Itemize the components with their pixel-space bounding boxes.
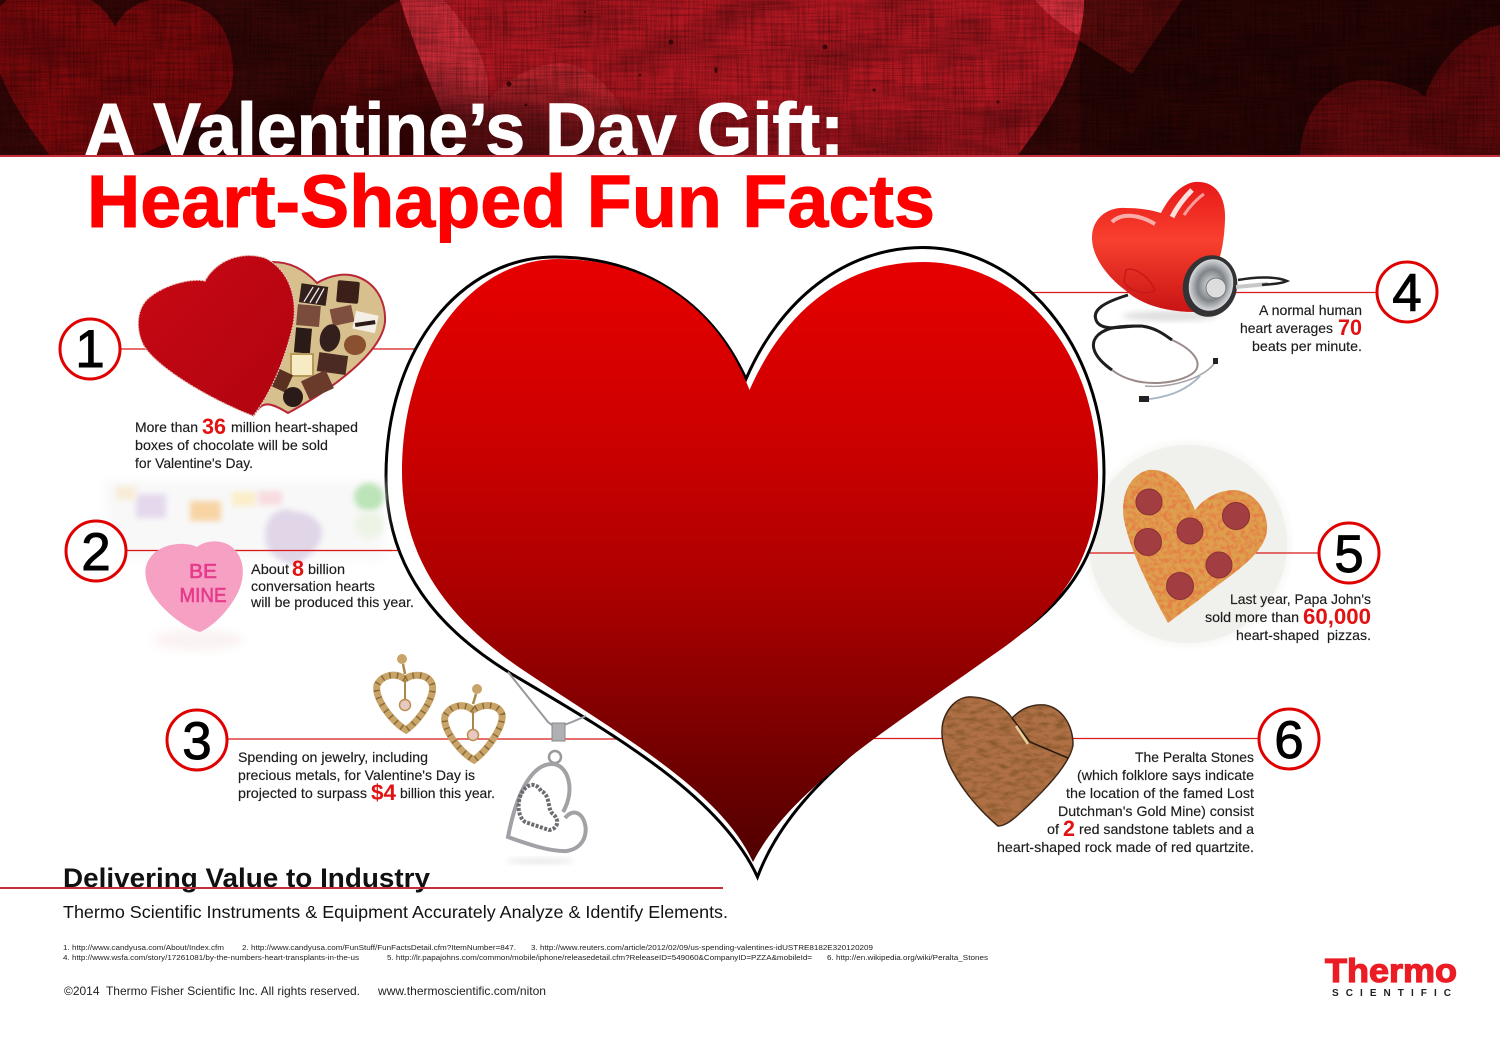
text: fact 1 (135, 414, 358, 471)
image: conversation heart: BE (189, 561, 217, 583)
text: fact 1: 36 (202, 414, 226, 439)
references: 3. http://www.reuters.com/article/2012/02/09/us-spending-valentines-idUSTRE8182E320120209 (531, 945, 873, 952)
connector line 2 over candy (126, 550, 392, 552)
image: conversation heart: MINE (180, 585, 226, 607)
header texture (0, 0, 1500, 155)
text: fact 6 (997, 749, 1254, 855)
text: fact 5: 60,000 (1303, 604, 1371, 629)
marker 2: 2 (81, 523, 111, 582)
marker 2 (66, 521, 126, 582)
text: fact 2: will be produced this year. (250, 594, 414, 610)
references: 2. http://www.candyusa.com/FunStuff/FunFactsDetail.cfm?ItemNumber=847. (242, 945, 516, 952)
image: conversation heart (145, 541, 244, 650)
text: fact 6: Dutchman's Gold Mine) consist (1058, 803, 1254, 819)
text: fact 1: boxes of chocolate will be sold (135, 437, 328, 453)
text: fact 5: Last year, Papa John's (1230, 591, 1371, 607)
text: fact 6: The Peralta Stones (1135, 749, 1254, 765)
text: fact 4 (1240, 302, 1362, 354)
text: fact 6: heart-shaped rock made of red quartzite. (997, 839, 1254, 855)
text: fact 1: More than (135, 419, 198, 435)
text: fact 3: projected to surpass (238, 785, 367, 801)
copyright line: www.thermoscientific.com/niton (377, 984, 546, 998)
text: fact 2: 8 (292, 556, 304, 581)
text: fact 3: Spending on jewelry, including (238, 749, 428, 765)
footer heading: Delivering Value to Industry (63, 863, 430, 893)
copyright line (64, 984, 546, 998)
right corner hearts (1075, 0, 1500, 155)
central heart outline (386, 248, 1104, 877)
text: fact 3: precious metals, for Valentine's Day is (238, 767, 475, 783)
image: heart pizza (1123, 470, 1268, 623)
text: fact 3: billion this year. (400, 785, 495, 801)
text: fact 4: beats per minute. (1252, 338, 1362, 354)
marker 6 (1259, 709, 1319, 770)
image: heart-shaped chocolate box (138, 255, 385, 416)
left fabric hearts (0, 0, 460, 155)
text: fact 2: conversation hearts (251, 578, 375, 594)
central red heart (402, 259, 1098, 862)
references: 6. http://en.wikipedia.org/wiki/Peralta_Stones (827, 955, 989, 962)
text: fact 1: for Valentine's Day. (135, 455, 253, 471)
text: fact 3: $4 (371, 780, 397, 805)
text: fact 2: About (251, 561, 289, 577)
footer tagline: Thermo Scientific Instruments & Equipment Accurately Analyze & Identify Elements. (63, 902, 728, 922)
title line one: A Valentine’s Day Gift: (84, 88, 844, 171)
references: 4. http://www.wsfa.com/story/17261081/by-the-numbers-heart-transplants-in-the-us (63, 955, 360, 962)
header banner (0, 0, 1500, 155)
marker 1: 1 (75, 320, 105, 379)
text: fact 6: (which folklore says indicate (1077, 767, 1254, 783)
big central heart (400, 0, 1084, 155)
logo: Thermo Scientific: Thermo (1325, 952, 1457, 989)
image: silver heart necklace (506, 672, 586, 864)
text: fact 1: million heart-shaped (231, 419, 358, 435)
text: fact 4: A normal human (1259, 302, 1362, 318)
logo: Thermo Scientific: SCIENTIFIC (1332, 988, 1451, 999)
header rule (0, 155, 1500, 157)
references: 5. http://lr.papajohns.com/common/mobile/iphone/releasedetail.cfm?ReleaseID=549060&CompanyID=PZZA&mobileId= (387, 955, 812, 962)
text: fact 5: heart-shaped pizzas. (1236, 627, 1371, 643)
text: fact 4: 70 (1338, 315, 1362, 340)
image: balloon heart with stethoscope (1092, 182, 1287, 402)
text: fact 4: heart averages (1240, 320, 1333, 336)
image: heart earrings (377, 654, 502, 760)
marker 5: 5 (1334, 525, 1364, 584)
references (63, 945, 989, 962)
text: fact 6: the location of the famed Lost (1066, 785, 1254, 801)
ink speckles (506, 11, 1000, 106)
references: 1. http://www.candyusa.com/About/Index.cfm (63, 945, 224, 952)
text: fact 6: red sandstone tablets and a (1079, 821, 1254, 837)
text: fact 2 (250, 556, 414, 610)
copyright line: ©2014 Thermo Fisher Scientific Inc. All rights reserved. (64, 984, 360, 998)
text: fact 6: of (1047, 821, 1059, 837)
title line two: Heart-Shaped Fun Facts (87, 160, 935, 243)
text: fact 5: sold more than (1205, 609, 1299, 625)
marker 5 (1319, 523, 1379, 584)
image: dinner plate (1085, 441, 1291, 647)
text: fact 2: billion (308, 561, 345, 577)
text: fact 5 (1205, 591, 1371, 643)
marker 1 (60, 319, 120, 379)
marker 3 (167, 710, 227, 771)
marker 3: 3 (182, 712, 212, 771)
image: blurred candy background (105, 480, 385, 565)
text: fact 6: 2 (1063, 816, 1075, 841)
footer rule (0, 887, 723, 889)
text: fact 3 (238, 749, 495, 805)
marker 4 (1377, 262, 1437, 323)
connector lines (120, 292, 1377, 739)
marker 4: 4 (1392, 264, 1422, 323)
image: Peralta stone heart (940, 695, 1075, 827)
marker 6: 6 (1274, 711, 1304, 770)
